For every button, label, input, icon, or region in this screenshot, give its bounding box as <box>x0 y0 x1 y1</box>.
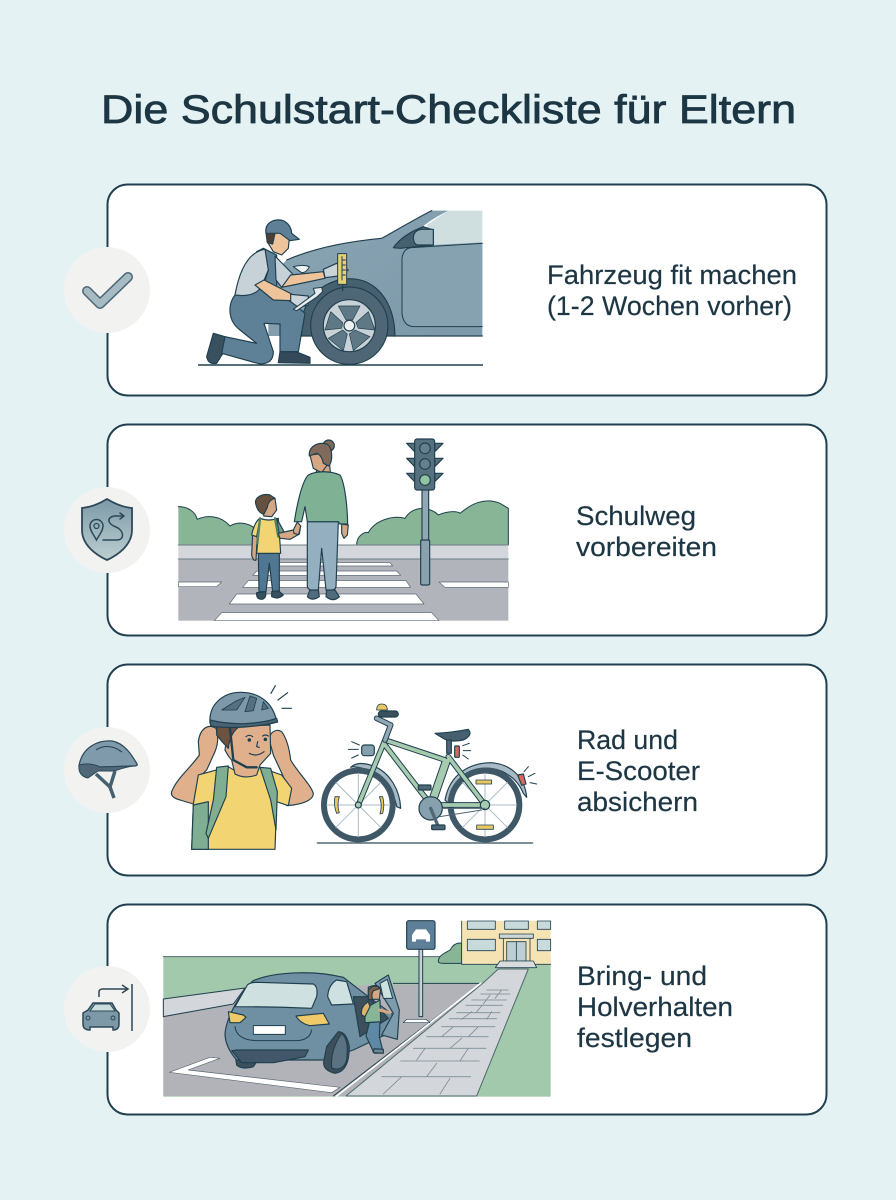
label: festlegen <box>577 1023 692 1053</box>
traffic light <box>422 488 429 542</box>
title: Die Schulstart-Checkliste für Eltern <box>101 88 796 132</box>
label: (1-2 Wochen vorher) <box>547 291 792 321</box>
shirt <box>235 249 268 296</box>
icon: shield with route <box>64 487 150 573</box>
arms <box>282 272 325 287</box>
card outline <box>108 184 826 396</box>
illustration: mechanic checks tyre tread <box>207 211 482 364</box>
gauge <box>341 283 344 291</box>
child arms <box>171 726 218 805</box>
open door <box>375 975 399 1039</box>
car <box>235 1053 260 1068</box>
panel: Bring- und Holverhalten festlegen <box>64 904 826 1114</box>
ground line <box>198 364 483 366</box>
label: Rad und <box>577 725 678 755</box>
label <box>547 260 797 321</box>
head <box>267 232 290 255</box>
icon: car pull-up to curb <box>64 966 150 1052</box>
child <box>366 1022 383 1053</box>
card outline <box>108 904 826 1114</box>
label: absichern <box>577 787 698 817</box>
card outline <box>108 424 826 636</box>
door opening <box>353 997 388 1037</box>
panel: Fahrzeug fit machen <box>64 184 826 396</box>
card outline <box>108 664 826 876</box>
label: Bring- und <box>577 961 707 991</box>
label: vorbereiten <box>576 532 717 562</box>
panel: Rad und E-Scooter absichern <box>64 664 826 876</box>
panel: Schulweg vorbereiten <box>64 424 826 636</box>
mother <box>307 522 338 590</box>
overalls <box>222 248 305 364</box>
label: E-Scooter <box>577 756 700 786</box>
child <box>258 553 279 592</box>
shirt <box>192 767 292 849</box>
label <box>577 961 733 1053</box>
bike <box>351 763 401 808</box>
illustration: drop-off zone at school <box>163 921 551 1097</box>
label: Holverhalten <box>577 992 733 1022</box>
label: Fahrzeug fit machen <box>547 260 797 290</box>
front wheel <box>302 279 395 336</box>
sign <box>419 949 423 1017</box>
head <box>225 725 271 777</box>
label <box>577 725 700 817</box>
label <box>576 501 717 562</box>
illustration: parent and child at crossing <box>178 439 508 621</box>
icon: check mark <box>64 247 150 333</box>
icon: helmet <box>64 727 150 813</box>
wrench <box>293 287 323 311</box>
illustration: child with helmet and bike <box>171 686 537 849</box>
label: Schulweg <box>576 501 696 531</box>
man: back boot <box>207 333 225 364</box>
